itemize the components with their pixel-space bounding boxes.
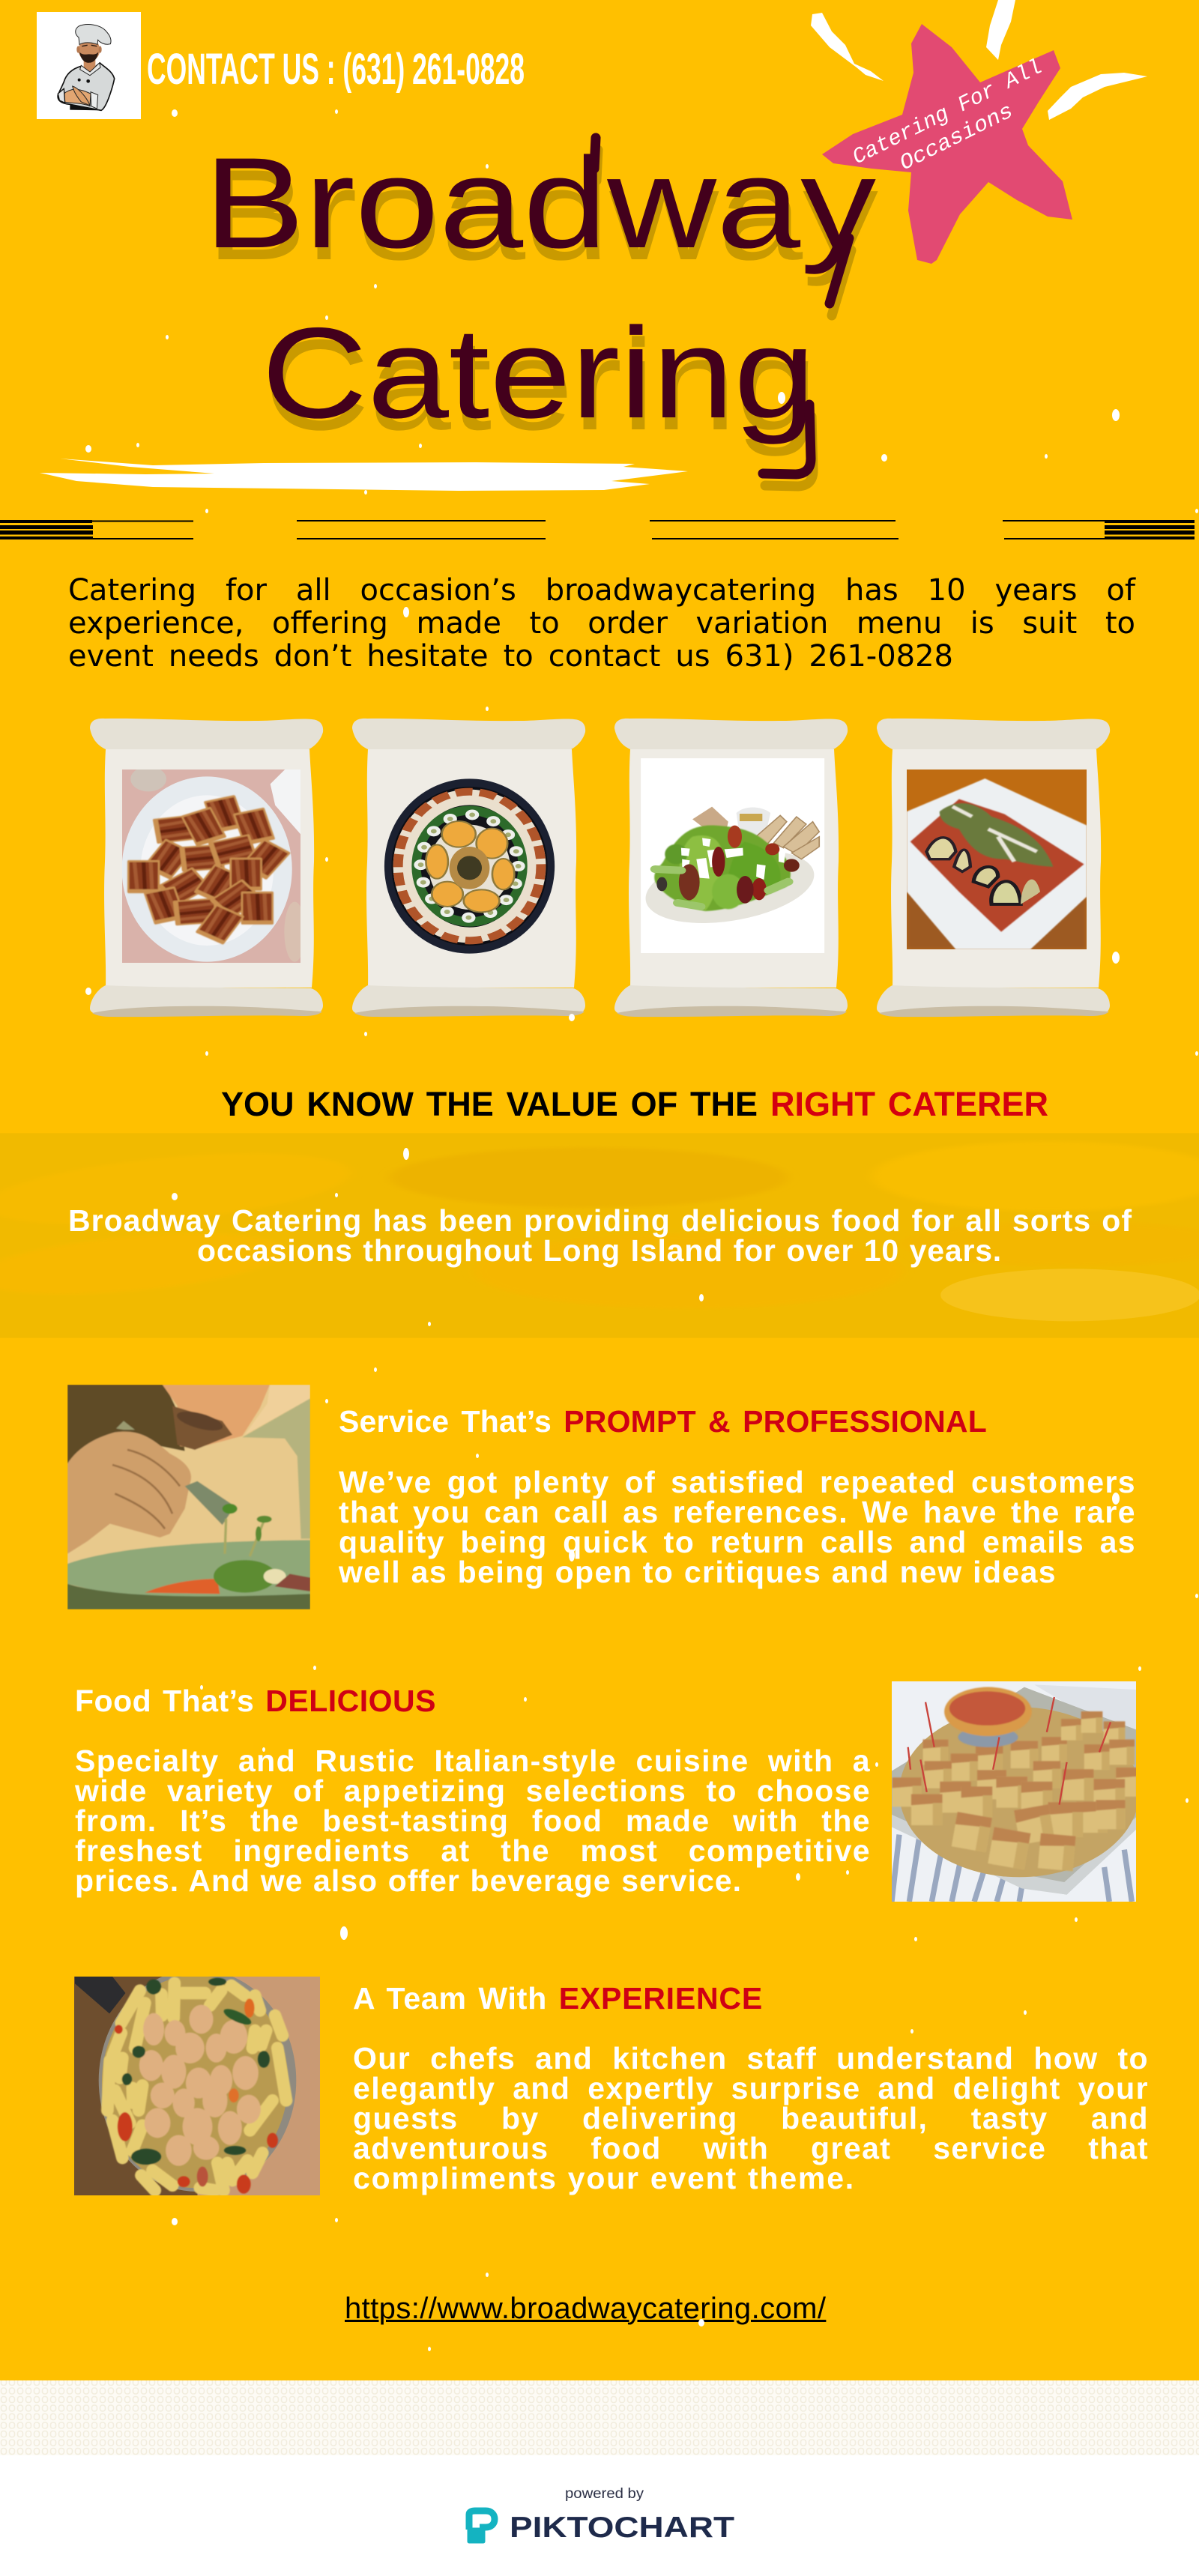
faded food band	[0, 1133, 1199, 1338]
band statement	[68, 1203, 1132, 1268]
photo: tortilla bites on tray	[892, 1681, 1136, 1902]
title: Broadway Catering	[204, 131, 876, 474]
white brush stroke under title	[40, 459, 688, 491]
service body: quality being quick to return calls and emails as	[339, 1525, 1136, 1559]
food body: wide variety of appetizing selections to choose	[75, 1774, 871, 1808]
intro paragraph: Catering for all occasion’s broadwaycatering has 10 years of	[68, 573, 1135, 608]
service body	[339, 1465, 1136, 1589]
heading: you know the value: YOU KNOW THE VALUE OF THE RIGHT CATERER	[221, 1085, 1048, 1123]
white footer	[0, 2455, 1199, 2576]
double rule with stripes	[0, 520, 1195, 539]
website link: https://www.broadwaycatering.com/	[345, 2292, 826, 2325]
photo: bacon bites on plate	[122, 770, 300, 963]
title: Broadway Catering: Catering	[262, 301, 815, 445]
photo: sushi platter	[384, 778, 555, 954]
food body: Specialty and Rustic Italian-style cuisine with a	[75, 1744, 871, 1778]
team body: Our chefs and kitchen staff understand how to	[353, 2041, 1149, 2075]
logo: chef illustration	[37, 12, 141, 119]
team body: adventurous food with great service that	[353, 2131, 1149, 2165]
service body: that you can call as references. We have the rare	[339, 1495, 1136, 1529]
service body: well as being open to critiques and new ideas	[339, 1555, 1057, 1589]
white brush strokes around star	[811, 0, 1147, 120]
food bag 1	[90, 719, 323, 1017]
team body: guests by delivering beautiful, tasty and	[353, 2101, 1149, 2135]
food body	[75, 1744, 871, 1898]
star tagline: Occasions	[896, 99, 1018, 176]
intro paragraph	[68, 573, 1136, 674]
photo: salad and bread platter	[641, 758, 824, 953]
service body: We’ve got plenty of satisfied repeated customers	[339, 1465, 1136, 1499]
food body: prices. And we also offer beverage service.	[75, 1863, 742, 1898]
intro paragraph: event needs don’t hesitate to contact us 631) 261-0828	[68, 639, 953, 674]
title: Broadway Catering: Broadway	[204, 131, 876, 275]
food bag 2	[352, 719, 585, 1017]
food body: freshest ingredients at the most competitive	[75, 1833, 871, 1868]
team heading: A Team With EXPERIENCE	[353, 1981, 763, 2016]
band statement: occasions throughout Long Island for over 10 years.	[197, 1233, 1002, 1268]
food bag 3	[614, 719, 848, 1017]
food body: from. It’s the best-tasting food made with the	[75, 1803, 871, 1838]
photo: shrimp penne pan	[74, 1977, 320, 2195]
service heading: Service That’s PROMPT & PROFESSIONAL	[339, 1404, 987, 1439]
textured strip above footer	[0, 2380, 1199, 2455]
photo: eggplant rollatini on white plate	[907, 770, 1087, 949]
star tagline: Catering For All	[848, 55, 1047, 170]
powered by label: powered by	[565, 2486, 644, 2502]
contact phone number: CONTACT US : (631) 261-0828	[147, 45, 525, 94]
team body: elegantly and expertly surprise and delight your	[353, 2071, 1149, 2105]
photo: chef plating with tweezers	[67, 1385, 310, 1609]
piktochart wordmark: PIKTOCHART	[510, 2512, 734, 2544]
team body	[353, 2041, 1149, 2195]
food heading: Food That’s DELICIOUS	[75, 1684, 436, 1718]
band statement: Broadway Catering has been providing delicious food for all sorts of	[68, 1203, 1132, 1238]
food bag 4	[877, 719, 1110, 1017]
piktochart logo icon	[469, 2511, 495, 2542]
pink star badge	[822, 24, 1072, 264]
team body: compliments your event theme.	[353, 2161, 855, 2195]
intro paragraph: experience, offering made to order variation menu is suit to	[68, 606, 1135, 641]
